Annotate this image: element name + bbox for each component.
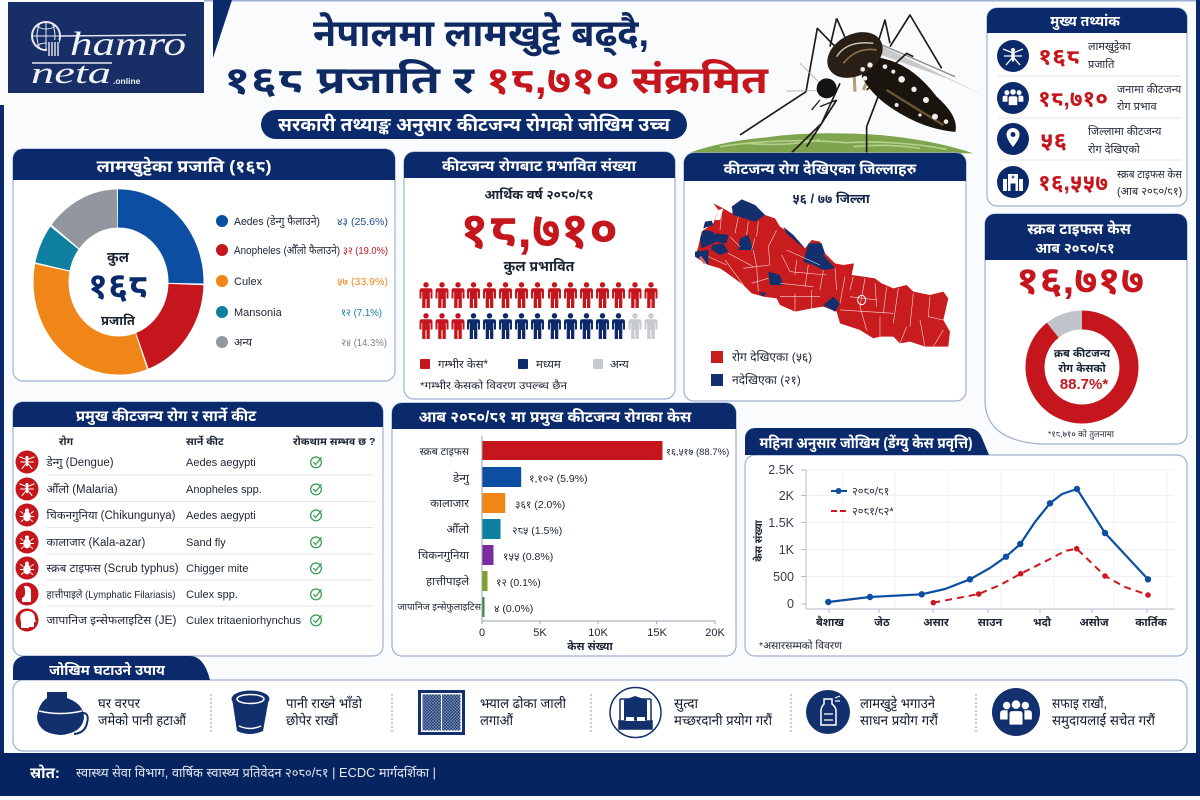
table header: सार्ने कीट <box>186 435 224 448</box>
bar chart: जापानिज इन्सेफुलाइटिस <box>398 601 482 613</box>
heading: species: लामखुट्टेका प्रजाति (१६८) <box>96 156 272 177</box>
row: malaria <box>16 478 322 500</box>
ring chart: scrub share: रोग केसको <box>1058 361 1107 375</box>
line chart: साउन <box>978 617 1003 629</box>
bar chart: १६,५१७ (88.7%) <box>666 447 729 458</box>
title <box>224 11 770 102</box>
panel: monthly risk line chart <box>745 428 1187 656</box>
donut chart: species: १६८ <box>88 265 148 306</box>
item: community awareness: सफाइ राखौं, <box>1052 695 1107 711</box>
table header: रोग <box>59 435 74 448</box>
heading: table: प्रमुख कीटजन्य रोग र सार्ने कीट <box>76 407 257 426</box>
stat: species: प्रजाति <box>1088 58 1115 71</box>
line chart: कार्तिक <box>1135 616 1168 629</box>
row: japanese encephalitis: जापानिज इन्सेफलाइटिस (JE) <box>46 614 177 627</box>
heading: districts: कीटजन्य रोग देखिएका जिल्लाहरु <box>724 160 917 178</box>
Nepal map <box>695 199 950 347</box>
panel: prevention <box>13 656 1187 751</box>
bar chart: केस संख्या <box>567 639 613 653</box>
left edge strip <box>0 105 4 755</box>
bar chart: 20K <box>705 627 725 639</box>
stat: species: लामखुट्टेका <box>1088 40 1131 53</box>
title: १८,७१० संक्रमित <box>486 58 770 102</box>
row: kala-azar <box>16 530 322 554</box>
ring chart: scrub share: 88.7%* <box>1060 376 1108 393</box>
bar chart: डेन्गु <box>452 472 470 485</box>
row: japanese encephalitis <box>16 608 322 632</box>
row: chikungunya: चिकनगुनिया (Chikungunya) <box>46 509 176 522</box>
footer: source <box>0 753 1200 796</box>
item: remove standing water: जमेको पानी हटाऔं <box>98 711 186 728</box>
item: remove standing water: घर वरपर <box>98 696 140 711</box>
donut chart: species <box>51 208 186 356</box>
ring chart: scrub share <box>1035 320 1129 414</box>
row: scrub typhus: स्क्रब टाइफस (Scrub typhus) <box>46 563 179 575</box>
row: kala-azar: Sand fly <box>186 537 226 549</box>
item: remove standing water <box>37 692 186 735</box>
bar chart: १,१०२ (5.9%) <box>529 473 588 485</box>
item: repellent: साधन प्रयोग गरौं <box>860 712 938 728</box>
mosquito illustration <box>690 15 987 153</box>
legend: species: ३२ (19.0%) <box>343 245 388 257</box>
line chart: जेठ <box>874 615 890 629</box>
line chart: 0 <box>787 597 794 611</box>
header corner triangle <box>213 0 232 58</box>
stat: affected people <box>997 82 1182 114</box>
table header: रोकथाम सम्भव छ ? <box>293 435 375 448</box>
bar chart: हात्तीपाइले <box>426 575 469 588</box>
fiscal year: आर्थिक वर्ष २०८०/८१ <box>484 187 594 202</box>
legend: species <box>216 215 388 349</box>
stat: districts <box>997 123 1162 156</box>
bar chart: २८५ (1.5%) <box>512 525 562 537</box>
line chart: 2K <box>779 489 795 503</box>
row: scrub typhus: Chigger mite <box>186 563 248 575</box>
row: dengue: डेन्गु (Dengue) <box>46 456 114 469</box>
row: lymphatic filariasis: Culex spp. <box>186 589 238 601</box>
line chart: 2.5K <box>768 463 795 477</box>
bar chart: 10K <box>588 627 608 639</box>
row: kala-azar: कालाजार (Kala-azar) <box>46 537 146 549</box>
legend: years: २०८१/८२* <box>852 506 894 518</box>
stat: districts: जिल्लामा कीटजन्य <box>1088 125 1162 138</box>
title: १६८ प्रजाति र <box>224 58 476 102</box>
panel: affected numbers <box>404 152 675 399</box>
stat: districts: ५६ <box>1040 128 1067 153</box>
bar chart: कालाजार <box>430 498 469 510</box>
row: malaria: औँलो (Malaria) <box>46 482 118 496</box>
stat: scrub typhus cases: स्क्रब टाइफस केस <box>1117 168 1183 181</box>
legend: species: ५७ (33.9%) <box>337 276 388 288</box>
item: bed net: सुत्दा <box>674 696 698 713</box>
item: community awareness <box>992 688 1155 736</box>
title: नेपालमा लामखुट्टे बढ्दै, <box>313 11 649 57</box>
panel: mosquito species <box>13 149 395 381</box>
stat: scrub typhus cases: (आब २०८०/८१) <box>1117 186 1182 198</box>
stat: affected people: जनामा कीटजन्य <box>1117 83 1182 96</box>
heading: bar chart: आब २०८०/८१ मा प्रमुख कीटजन्य रोगका केस <box>419 407 692 427</box>
legend: species: Mansonia <box>234 307 283 319</box>
item: cover water containers: छोपेर राखौं <box>286 711 338 728</box>
table header <box>59 435 375 448</box>
donut chart: species: प्रजाति <box>101 313 136 328</box>
footer: source: स्वास्थ्य सेवा विभाग, वार्षिक स्वास्थ्य प्रतिवेदन २०८०/८१ | ECDC मार्गदर्शिका | <box>76 765 436 780</box>
item: cover water containers: पानी राख्ने भाँडो <box>286 694 362 711</box>
bar chart: 5K <box>533 627 547 639</box>
footer: source: स्रोत: <box>30 765 60 782</box>
item: repellent: लामखुट्टे भगाउने <box>860 694 935 713</box>
row: scrub typhus <box>16 556 322 580</box>
item: cover water containers <box>232 690 362 734</box>
people pictogram <box>420 282 658 339</box>
footnote: *गम्भीर केसको विवरण उपल्ब्ध छैन <box>420 379 567 392</box>
top edge line <box>204 0 1196 2</box>
footnote: *असारसम्मको विवरण <box>759 639 842 652</box>
legend: years <box>831 486 894 518</box>
heading: scrub typhus: स्क्रब टाइफस केस <box>1027 220 1132 238</box>
logo: neta <box>31 55 111 90</box>
legend: species: अन्य <box>234 337 253 349</box>
stat: scrub typhus cases: १६,५५७ <box>1038 170 1108 195</box>
legend: districts <box>711 349 812 387</box>
stat: species: १६८ <box>1038 44 1080 69</box>
subtitle pill <box>261 110 687 139</box>
bar chart: स्क्रब टाइफस <box>420 446 470 458</box>
row: dengue: Aedes aegypti <box>186 457 256 469</box>
line chart <box>752 463 1175 652</box>
legend: severity: गम्भीर केस* <box>438 358 488 371</box>
item: window nets: झ्याल ढोका जाली <box>480 695 566 711</box>
bar chart: ४ (0.0%) <box>494 603 533 615</box>
heading: affected: कीटजन्य रोगबाट प्रभावित संख्या <box>442 157 636 175</box>
item: window nets <box>418 690 566 735</box>
row: dengue <box>16 450 322 474</box>
bar chart: १५५ (0.8%) <box>503 551 553 563</box>
legend: districts: नदेखिएका (२१) <box>732 372 801 387</box>
item: repellent <box>806 690 938 734</box>
bar chart: १२ (0.1%) <box>496 577 541 589</box>
subtitle pill: सरकारी तथ्याङ्क अनुसार कीटजन्य रोगको जोखिम उच्च <box>278 113 671 137</box>
big number: १८,७१० <box>460 202 618 258</box>
scrub typhus total: १६,७१७ <box>1016 260 1144 302</box>
item: bed net: मच्छरदानी प्रयोग गरौं <box>674 712 772 728</box>
panel: affected districts <box>684 153 966 401</box>
heading: line chart: महिना अनुसार जोखिम (डेंग्यु केस प्रवृत्ति) <box>760 434 972 453</box>
line chart: असोज <box>1079 616 1109 629</box>
legend: species: १२ (7.1%) <box>341 307 382 319</box>
leaf <box>690 133 973 153</box>
stat: scrub typhus cases <box>997 166 1183 198</box>
legend: severity <box>420 358 629 371</box>
legend: severity: अन्य <box>610 359 629 371</box>
row: malaria: Anopheles spp. <box>186 484 262 496</box>
bar chart: 15K <box>647 627 667 639</box>
heading: scrub typhus: आब २०८०/८१ <box>1035 240 1115 256</box>
line chart: 500 <box>773 570 794 584</box>
bar chart: 0 <box>479 627 485 639</box>
item: bed net <box>610 688 772 738</box>
right edge strip <box>1196 0 1200 755</box>
heading: scrub typhus <box>1027 220 1132 256</box>
line chart: केस संख्या <box>752 519 765 562</box>
stat: districts: रोग देखिएको <box>1088 143 1140 156</box>
heading: key facts: मुख्य तथ्यांक <box>1050 13 1120 31</box>
legend: species: २४ (14.3%) <box>341 337 387 349</box>
item: community awareness: समुदायलाई सचेत गरौं <box>1052 711 1155 730</box>
row: japanese encephalitis: Culex tritaeniorhynchus <box>186 615 301 627</box>
row: lymphatic filariasis <box>16 582 322 606</box>
logo: hamro <box>70 26 186 63</box>
logo <box>8 2 204 93</box>
footnote: *१८,७१० को तुलनामा <box>1048 429 1115 440</box>
legend: severity: मध्यम <box>536 359 562 371</box>
legend: years: २०८०/८१ <box>852 486 889 498</box>
line chart: भदौ <box>1033 616 1052 629</box>
line chart: बैशाख <box>816 616 844 629</box>
legend: species: ४३ (25.6%) <box>337 216 388 228</box>
row: chikungunya: Aedes aegypti <box>186 510 256 522</box>
row: lymphatic filariasis: हात्तीपाइले (Lymphatic Filariasis) <box>46 588 176 601</box>
stat: affected people: रोग प्रभाव <box>1117 100 1157 113</box>
panel: scrub typhus <box>985 214 1187 444</box>
heading: prevention: जोखिम घटाउने उपाय <box>49 661 166 678</box>
line chart: 1K <box>779 543 795 557</box>
row: chikungunya <box>16 504 322 526</box>
bar chart: औँलो <box>446 522 470 536</box>
bar chart <box>398 436 729 653</box>
logo: .online <box>113 76 141 86</box>
panel: diseases and vectors table <box>13 402 383 656</box>
item: window nets: लगाऔं <box>480 712 513 728</box>
legend: species: Anopheles (औँलो फैलाउने) <box>234 244 340 257</box>
panel: key facts <box>987 8 1187 206</box>
legend: districts: रोग देखिएका (५६) <box>732 349 812 364</box>
stat: affected people: १८,७१० <box>1038 86 1108 111</box>
line chart: 1.5K <box>768 516 795 530</box>
bar chart: चिकनगुनिया <box>418 549 470 562</box>
line chart: असार <box>923 617 950 629</box>
legend: species: Aedes (डेन्गु फैलाउने) <box>234 215 320 228</box>
total label: कुल प्रभावित <box>504 258 575 276</box>
ring chart: scrub share: क्रब कीटजन्य <box>1054 347 1111 360</box>
panel: cases bar chart <box>392 403 736 656</box>
district count: ५६ / ७७ जिल्ला <box>792 191 871 206</box>
bar chart: ३६१ (2.0%) <box>515 499 565 511</box>
donut chart: species: कुल <box>107 249 130 267</box>
legend: species: Culex <box>234 276 263 288</box>
stat: species <box>997 40 1131 72</box>
